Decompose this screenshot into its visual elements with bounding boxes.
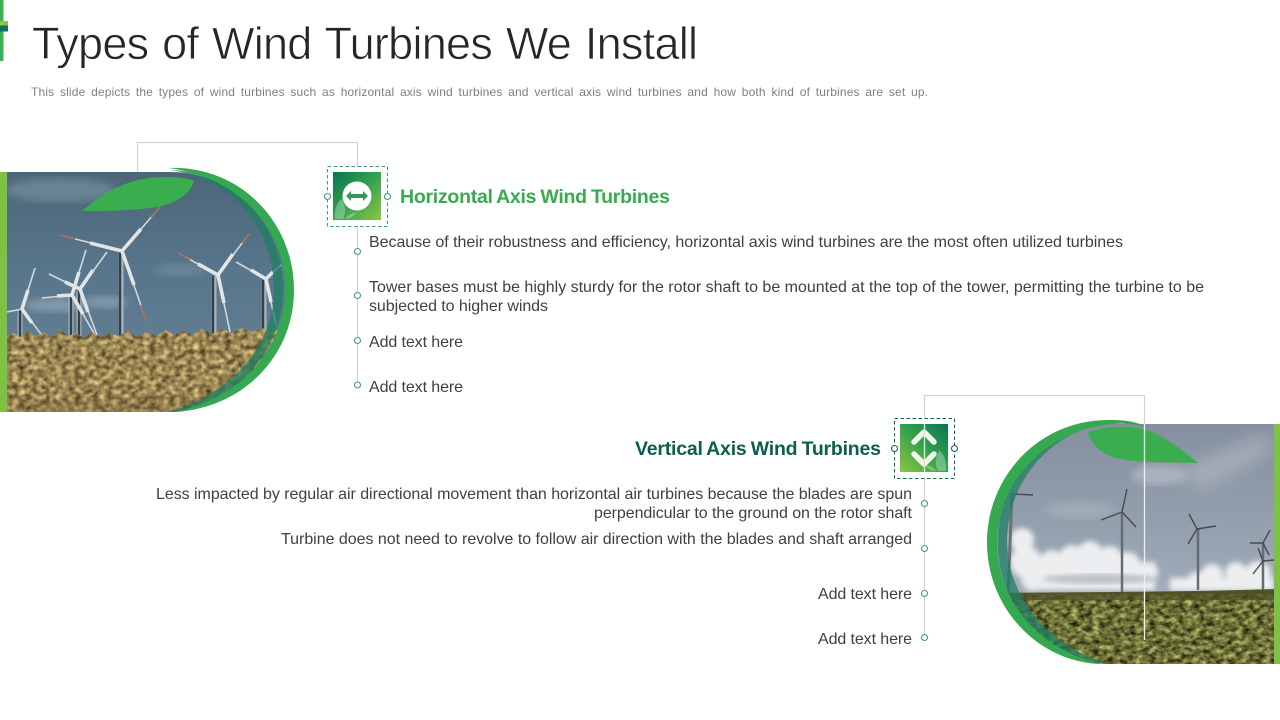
white guide line over photo [1144, 424, 1146, 640]
green crescent [987, 420, 1150, 664]
connector bracket: vertical [924, 396, 1144, 637]
text block: horizontal points: Add text here [369, 379, 463, 396]
text block: horizontal points: subjected to higher winds [369, 298, 548, 315]
text block: horizontal points: Tower bases must be highly sturdy for the rotor shaft to be mounted at the top of the tower, permitting the turbine to be [369, 279, 1204, 296]
text block: vertical points: Add text here [818, 631, 912, 648]
text block: vertical points: Turbine does not need to revolve to follow air direction with the blades and shaft arranged [281, 531, 912, 548]
text block: vertical points: Less impacted by regular air directional movement than horizontal air turbines because the blades are spun [156, 486, 912, 503]
text block: vertical points: perpendicular to the ground on the rotor shaft [594, 505, 913, 522]
leaf [82, 177, 194, 211]
accent bar [0, 172, 7, 412]
title: Types of Wind Turbines We Install [32, 18, 698, 69]
accent bar [1274, 424, 1280, 664]
photo: wheat field with wind turbines [5, 172, 292, 412]
heading: horizontal: Horizontal Axis Wind Turbines [400, 186, 670, 208]
text block: horizontal points [369, 234, 1204, 396]
photo: crop field with wind turbines [990, 424, 1274, 664]
heading: vertical: Vertical Axis Wind Turbines [635, 438, 881, 460]
green crescent [168, 168, 294, 412]
corner accent mark [0, 0, 8, 61]
panel: vertical axis wind turbines [156, 396, 1280, 664]
connector dots [324, 194, 390, 388]
subtitle: This slide depicts the types of wind turbines such as horizontal axis wind turbines and vertical axis wind turbines and how both kind of turbines are set up. [31, 85, 928, 99]
text block: vertical points: Add text here [818, 586, 912, 603]
icon: up-down arrows [894, 418, 954, 478]
text block: horizontal points: Because of their robustness and efficiency, horizontal axis wind turbines are the most often utilized turbines [369, 234, 1123, 251]
connector dots [892, 446, 958, 640]
text block: horizontal points: Add text here [369, 334, 463, 351]
panel: horizontal axis wind turbines [0, 142, 1204, 412]
icon: left-right arrows [328, 166, 388, 226]
leaf [1088, 427, 1198, 463]
text block: vertical points [156, 486, 913, 648]
connector bracket: horizontal [138, 142, 358, 385]
